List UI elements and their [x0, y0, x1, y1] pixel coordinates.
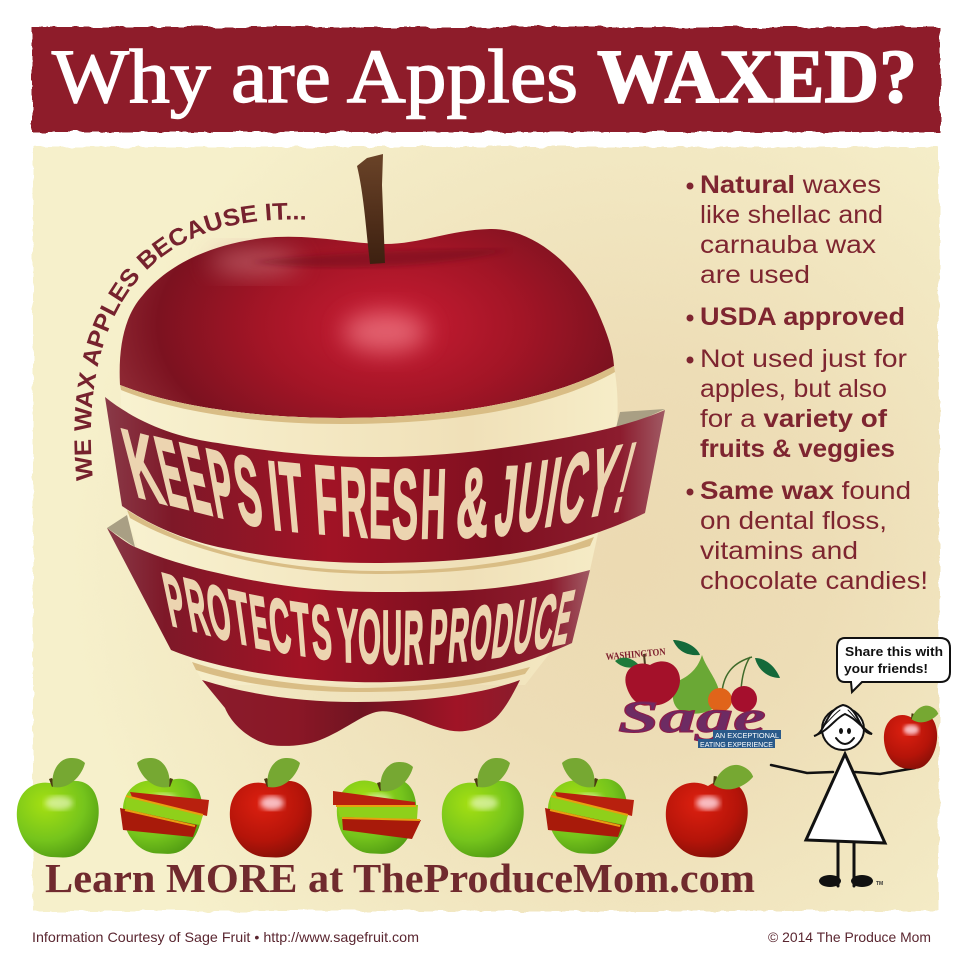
ribbon 2 text: R: [446, 593, 472, 679]
tan rim under dome: [120, 366, 615, 424]
ribbon: keeps it fresh: [105, 397, 665, 563]
ribbon 2 text: R: [179, 561, 214, 652]
green apple 5: [442, 758, 524, 857]
speech bubble: [837, 638, 950, 692]
bullet: natural waxes: Natural waxes: [700, 171, 881, 199]
ribbon 1 text: &: [454, 447, 492, 558]
ribbon 2 text: C: [265, 582, 295, 671]
ribbon 1 text: T: [276, 441, 308, 553]
arms: [771, 765, 915, 774]
bullet list: [686, 171, 928, 595]
sliced apple 4: [333, 762, 421, 854]
Sage wordmark: Sage: [618, 691, 766, 742]
copyright: © 2014 The Produce Mom: [768, 929, 931, 945]
apple dome: [120, 229, 614, 418]
red apple 3: [230, 758, 312, 857]
top rim sheen: [210, 250, 300, 274]
head and hair: [814, 705, 872, 750]
sliced apple 6: [545, 758, 634, 854]
bullet: natural waxes: like shellac and: [700, 201, 883, 229]
big apple illustration: [105, 154, 665, 746]
ribbon 1 text: [113, 408, 644, 559]
band 1 back piece: [615, 409, 665, 432]
ribbon 1 text: I: [540, 437, 567, 549]
apple: [625, 661, 680, 706]
bullet: variety: fruits & veggies: [700, 435, 895, 463]
pear: [673, 655, 720, 714]
band 2 back piece: [107, 515, 135, 547]
learn more line: Learn MORE at TheProduceMom.com: [45, 855, 755, 901]
ribbon 1 text: !: [606, 423, 644, 533]
speech bubble: Share this with: [845, 644, 943, 659]
ribbon 2 text: O: [466, 590, 496, 677]
bullet: same wax: chocolate candies!: [700, 567, 928, 595]
band 1 shadow: [127, 510, 594, 574]
bullet: USDA approved: USDA approved: [700, 303, 905, 331]
red apple 7: [666, 757, 755, 857]
dome highlight: [343, 312, 427, 352]
ribbon 1 text: F: [312, 444, 340, 556]
green apple 1: [17, 758, 99, 857]
sliced apple 2: [120, 758, 209, 854]
apple stem: [357, 154, 385, 264]
tagline box: [713, 730, 781, 739]
ribbon 1 text: K: [113, 408, 173, 526]
WASHINGTON: WASHINGTON: [605, 647, 667, 663]
ribbon 2 text: T: [226, 574, 255, 663]
held apple: [884, 700, 940, 769]
ribbon 2 text: E: [246, 579, 273, 667]
ribbon 1 text: E: [147, 417, 195, 531]
band 2 shadow: [192, 662, 530, 692]
ribbon 2 text: U: [508, 582, 540, 671]
ribbon 1 text: H: [419, 449, 448, 559]
ribbon 2 text: P: [427, 594, 449, 680]
ribbon 1 text: S: [228, 434, 268, 549]
speech bubble: your friends!: [844, 661, 928, 676]
big apple illustration: E: [548, 575, 580, 663]
bullet: variety: for a variety of: [700, 405, 888, 433]
ribbon 2 text: D: [488, 587, 518, 675]
stick figure: [771, 638, 950, 887]
ribbon 2 text: P: [157, 556, 192, 647]
cream panel: [33, 147, 939, 911]
Sage logo: AN EXCEPTIONAL: [715, 733, 779, 740]
ribbon 2 text: O: [358, 594, 381, 680]
ribbon 1 text: E: [173, 422, 219, 537]
dress: [806, 754, 885, 843]
ribbon 2 text: U: [382, 596, 402, 681]
title banner: [32, 27, 940, 132]
ribbon 1 text: S: [392, 449, 418, 559]
bullet: same wax: on dental floss,: [700, 507, 887, 535]
ribbon 2 text: O: [201, 568, 237, 658]
ribbon 2 text: R: [403, 596, 424, 681]
dimple: [250, 250, 510, 267]
ribbon 2 text: [157, 556, 580, 681]
bullet: same wax: Same wax found: [700, 477, 911, 505]
title text: WAXED?: [597, 35, 917, 119]
Sage logo: EATING EXPERIENCE: [700, 742, 773, 749]
legs and feet: [819, 843, 873, 887]
ribbon 2 text: T: [289, 587, 313, 674]
bullet: variety: [686, 345, 907, 463]
ribbon 1 text: P: [200, 428, 242, 543]
ribbon 1 text: J: [491, 445, 522, 556]
cherries: [722, 657, 752, 692]
row of apples: [17, 757, 755, 857]
ribbon 1 text: I: [264, 440, 285, 551]
ribbon: protects your produce: [107, 528, 590, 682]
bullet: variety: apples, but also: [700, 375, 887, 403]
ribbon 1 text: R: [338, 446, 369, 558]
ribbon 1 text: Y: [577, 425, 627, 540]
ribbon 1 text: E: [369, 448, 391, 559]
bullet: natural waxes: are used: [700, 261, 810, 289]
title text: Why are Apples: [52, 35, 578, 119]
ribbon 2 text: Y: [337, 593, 359, 679]
bullet: natural waxes: carnauba wax: [700, 231, 877, 259]
stick figure: TM: [876, 881, 883, 887]
title text: [52, 35, 917, 119]
ribbon 1 text: C: [551, 431, 597, 546]
bullet: natural waxes: [686, 171, 883, 289]
bullet: variety: Not used just for: [700, 345, 907, 373]
ribbon 1 text: U: [512, 439, 553, 553]
ribbon 2 text: S: [309, 589, 334, 677]
bullet: same wax: [686, 477, 928, 595]
Sage logo: [605, 640, 781, 749]
ribbon 2 text: C: [528, 578, 562, 667]
cream flesh: [120, 366, 618, 685]
apple bottom: [202, 680, 520, 746]
bullet: same wax: vitamins and: [700, 537, 858, 565]
arched caption: WE WAX APPLES BECAUSE IT...: [74, 202, 305, 482]
source footer: Information Courtesy of Sage Fruit • http://www.sagefruit.com: [32, 929, 419, 945]
